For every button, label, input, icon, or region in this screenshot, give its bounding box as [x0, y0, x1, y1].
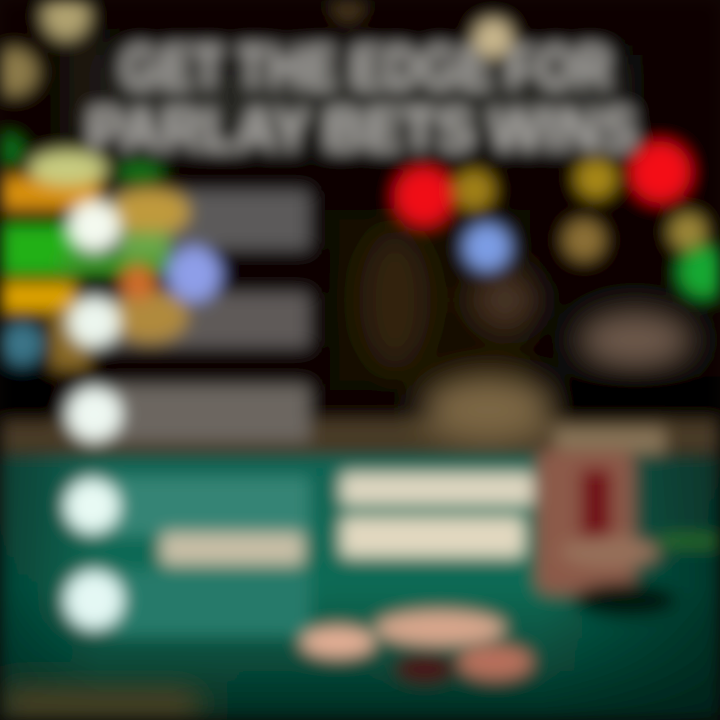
row 3 [110, 384, 310, 442]
bullet 2 [68, 296, 120, 348]
green poker table felt [0, 455, 720, 720]
title [87, 34, 637, 163]
scattered chips in foreground [300, 610, 533, 682]
table rail [0, 374, 720, 454]
panel: list rows [110, 190, 310, 636]
title: PARLAY BETS WINS [87, 96, 637, 163]
bullet 5 [64, 570, 124, 630]
title backing haze [105, 55, 625, 145]
bullet 4 [64, 478, 120, 534]
bullet 1 [68, 200, 120, 252]
background bokeh lights [0, 0, 720, 298]
bullet 3 [66, 386, 122, 442]
bokeh light over title [473, 18, 513, 58]
playing cards on the table [160, 472, 535, 566]
stack of poker chips [535, 450, 720, 616]
title: GET THE EDGE FOR [121, 34, 611, 101]
row 2 [110, 292, 310, 348]
player silhouette at right [555, 310, 720, 454]
row 1 [110, 190, 310, 250]
row 4 [110, 476, 310, 536]
colourful game graphic at left [0, 134, 222, 420]
icons: white bullet circles [64, 200, 124, 630]
row 5 [110, 570, 310, 636]
